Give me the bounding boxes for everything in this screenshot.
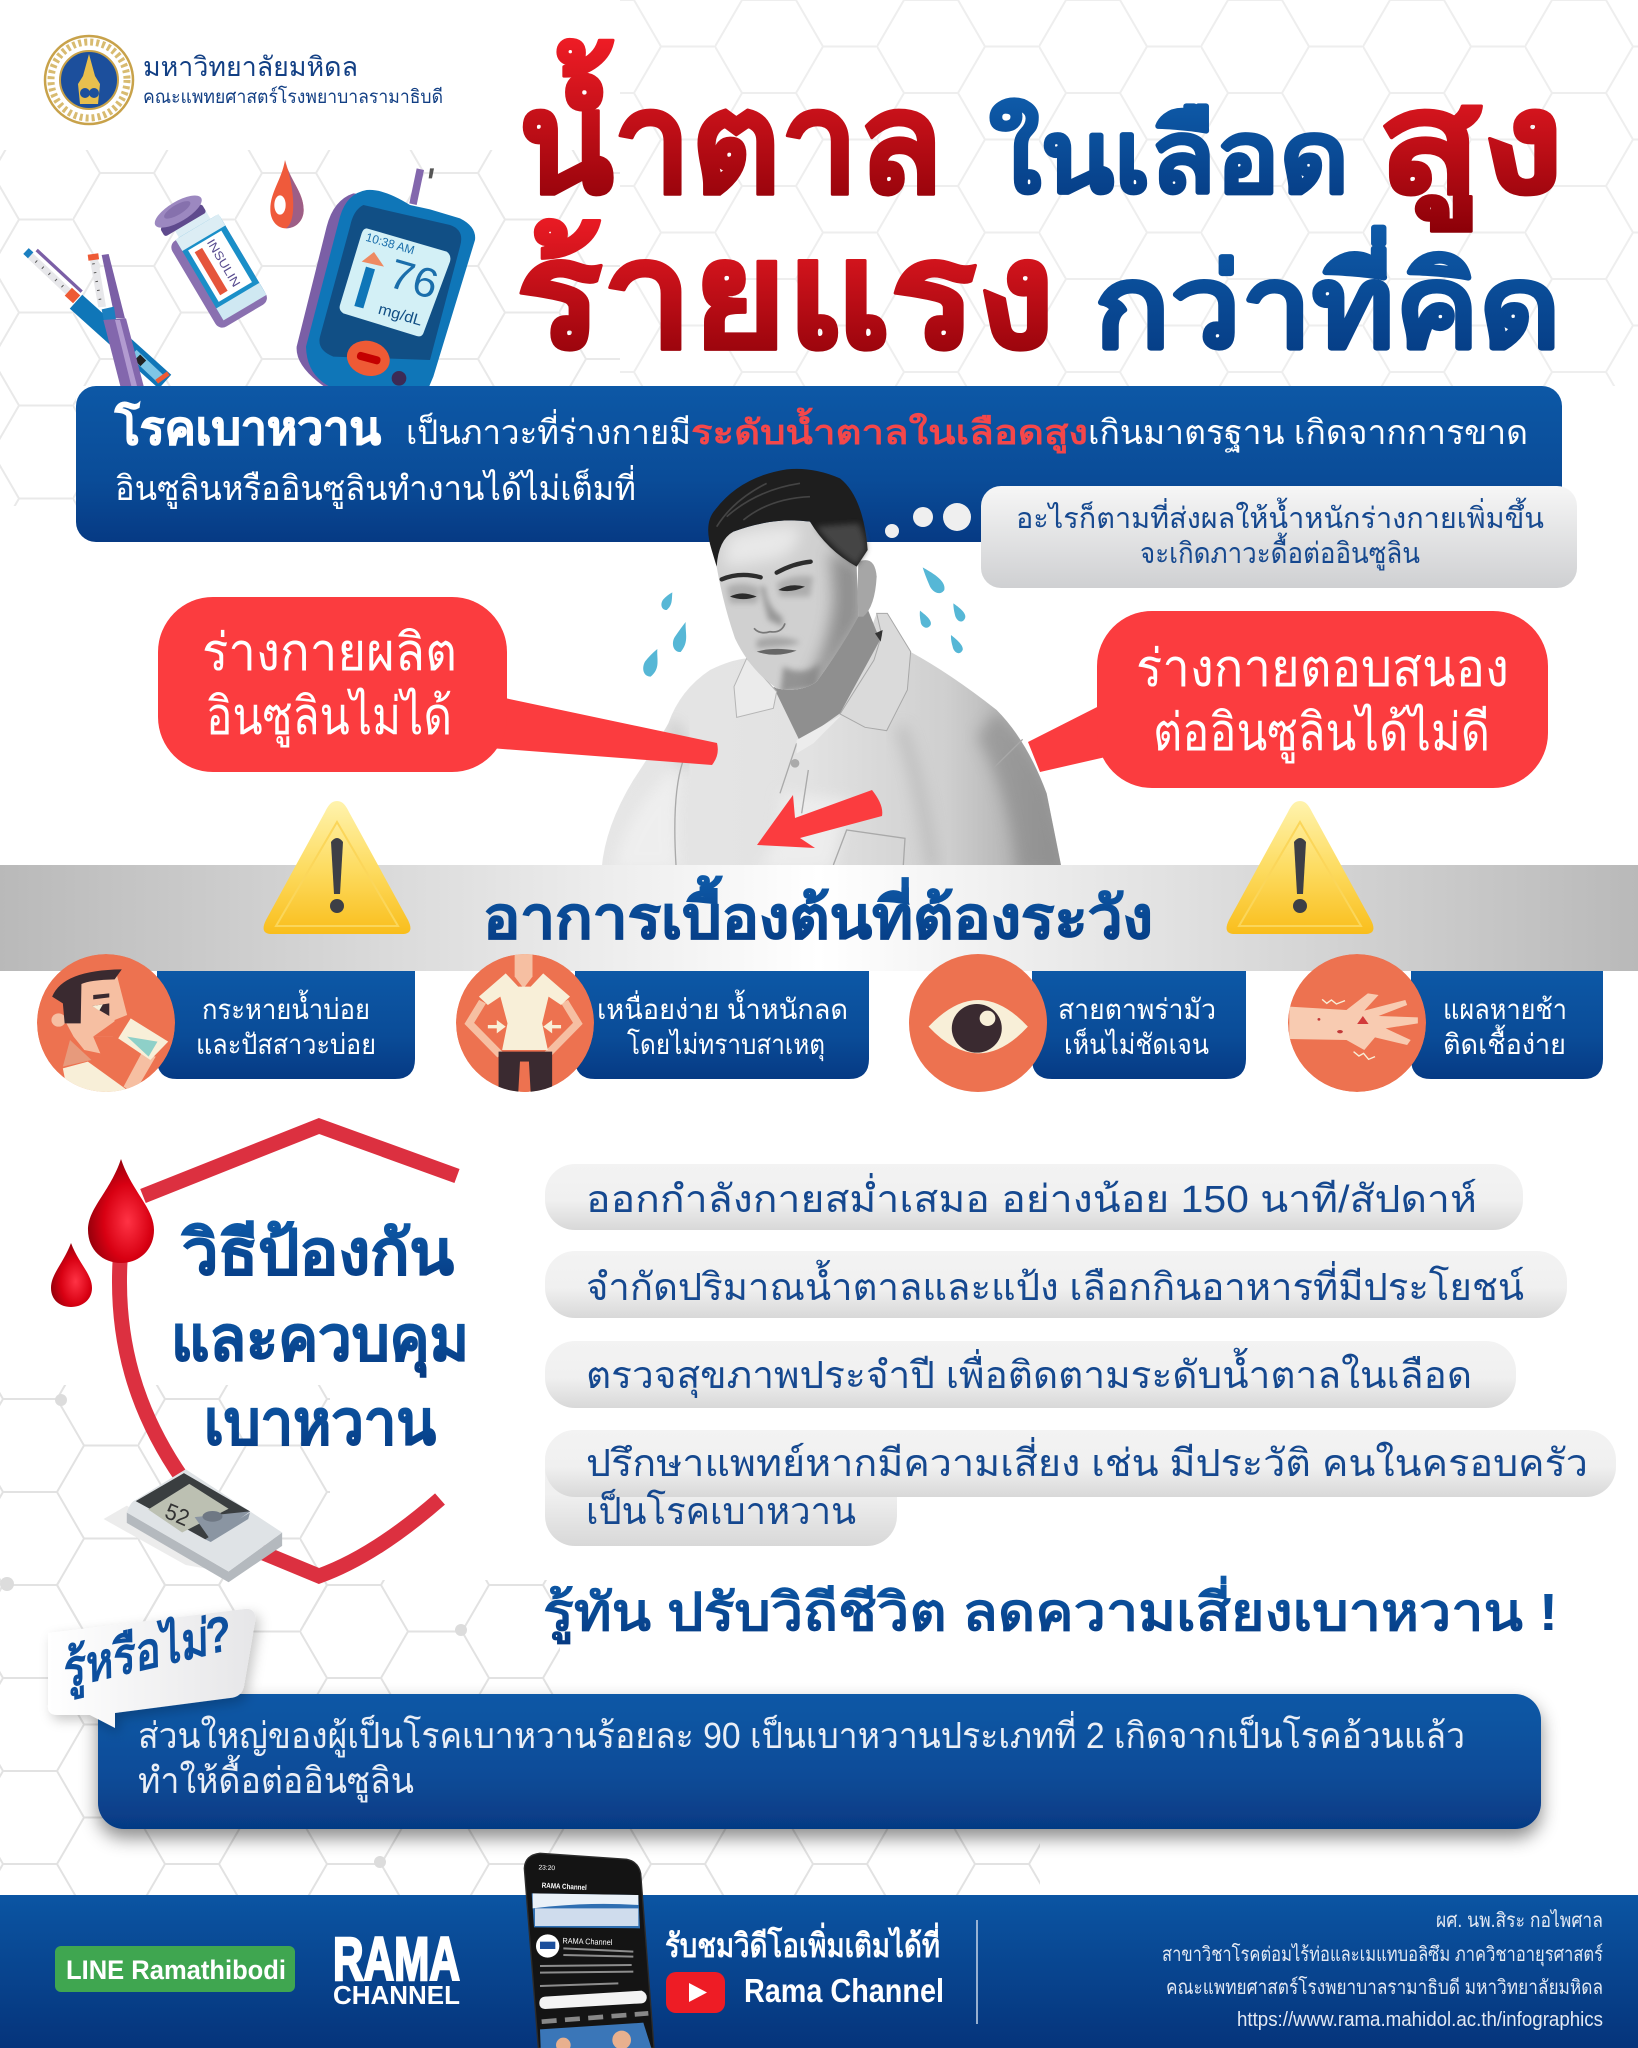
panel: did you know fact: ส่วนใหญ่ของผู้เป็นโรคเบาหวานร้อยละ 90 เป็นเบาหวานประเภทที่ 2 เกิดจากเป็นโรคอ้วนแล้ว xyxy=(138,1711,1465,1758)
icon: glucose meter xyxy=(297,168,475,388)
heading band: early symptoms xyxy=(0,865,1638,971)
symptom: fatigue and weight loss xyxy=(456,952,869,1093)
faculty name: คณะแพทยศาสตร์โรงพยาบาลรามาธิบดี xyxy=(143,85,443,108)
symptom label: สายตาพร่ามัว xyxy=(1058,994,1216,1025)
icon: blood glucose meter device xyxy=(104,1469,282,1582)
advice: consult doctor xyxy=(545,1430,1616,1546)
symptom: slow wound healing xyxy=(1288,954,1603,1092)
definition text line 1 xyxy=(406,407,1528,454)
author credits xyxy=(1162,1909,1603,2031)
undershirt opening xyxy=(797,715,842,753)
callout: insulin resistance note xyxy=(981,486,1577,588)
callout: body cannot produce insulin: อินซูลินไม่ได้ xyxy=(206,687,452,748)
panel: prevention heading xyxy=(51,1126,469,1582)
hair xyxy=(708,469,868,567)
icon: insulin vial xyxy=(150,186,270,331)
logo: RAMA Channel: RAMA xyxy=(333,1925,460,1993)
definition text line 2: อินซูลินหรืออินซูลินทำงานได้ไม่เต็มที่ xyxy=(115,465,636,509)
tag: did you know xyxy=(48,1604,255,1728)
illustration: diabetes supplies xyxy=(26,160,475,388)
title xyxy=(516,39,1564,379)
LINE button xyxy=(55,1946,295,1992)
symptom label xyxy=(1411,971,1603,1079)
panel: did you know fact: ทำให้ดื้อต่ออินซูลิน xyxy=(138,1754,414,1803)
photo: worried man xyxy=(602,469,1067,873)
symptom: blurred vision xyxy=(909,954,1246,1092)
prevention heading text: และควบคุม xyxy=(171,1305,469,1377)
symptom label: เห็นไม่ชัดเจน xyxy=(1064,1027,1209,1060)
advice: exercise: ออกกำลังกายสม่ำเสมอ อย่างน้อย 150 นาที/สัปดาห์ xyxy=(586,1173,1477,1221)
advice: consult doctor: เป็นโรคเบาหวาน xyxy=(586,1488,856,1533)
ear xyxy=(857,560,877,617)
icon: glucose meter: mg/dL xyxy=(376,301,425,330)
definition term: โรคเบาหวาน xyxy=(114,401,382,454)
callout: body cannot produce insulin xyxy=(158,597,718,772)
icon: eye xyxy=(909,954,1047,1092)
prevention heading text: เบาหวาน xyxy=(204,1389,436,1458)
logo: RAMA Channel xyxy=(333,1925,460,2010)
symptom label: เหนื่อยง่าย น้ำหนักลด xyxy=(597,989,848,1025)
panel: did you know fact xyxy=(98,1694,1541,1829)
icon: small blood drop xyxy=(51,1243,92,1307)
channel name: Rama Channel xyxy=(744,1972,944,2009)
title: ร้ายแรง xyxy=(516,211,1055,379)
shirt xyxy=(602,613,1067,873)
symptom label: กระหายน้ำบ่อย xyxy=(202,989,370,1025)
phone mockup xyxy=(524,1853,654,2048)
advice: diet: จำกัดปริมาณน้ำตาลและแป้ง เลือกกินอาหารที่มีประโยชน์ xyxy=(586,1259,1524,1309)
title: น้ำตาล xyxy=(519,39,943,223)
symptom: thirst and frequent urination xyxy=(37,954,415,1100)
arrow: pointing to the body xyxy=(757,790,882,848)
eyebrows xyxy=(722,562,811,579)
phone mockup: RAMA Channel xyxy=(562,1936,613,1947)
advice: exercise xyxy=(545,1164,1523,1230)
icon: wounded hand xyxy=(1288,954,1426,1092)
definition text line 1: เป็นภาวะที่ร่างกายมี xyxy=(406,409,691,452)
icon: YouTube xyxy=(666,1972,725,2013)
collar xyxy=(734,613,911,731)
symptom label: และปัสสาวะบ่อย xyxy=(196,1029,376,1060)
symptom label: โดยไม่ทราบสาเหตุ xyxy=(627,1028,825,1062)
icon: insulin pen one xyxy=(26,250,168,382)
eyes xyxy=(730,585,805,599)
symptom label: แผลหายช้า xyxy=(1443,994,1567,1025)
mouth xyxy=(757,649,797,655)
phone mockup: 23:20 xyxy=(538,1864,556,1872)
icon: glucose meter: 10:38 AM xyxy=(364,230,416,257)
author credits: https://www.rama.mahidol.ac.th/infographics xyxy=(1237,2009,1603,2031)
title: ในเลือด xyxy=(989,99,1349,214)
phone mockup: RAMA Channel xyxy=(542,1881,587,1892)
symptom label xyxy=(1032,971,1246,1079)
icon: blood glucose meter device: 52 xyxy=(162,1498,193,1531)
callout: insulin resistance note: จะเกิดภาวะดื้อต่ออินซูลิน xyxy=(1140,532,1420,571)
logo: RAMA Channel: CHANNEL xyxy=(333,1980,460,2010)
list: prevention advice xyxy=(545,1164,1616,1546)
icon: slim waist xyxy=(456,952,594,1093)
university name: มหาวิทยาลัยมหิดล xyxy=(143,52,358,82)
nose xyxy=(754,623,785,633)
symptom label: ติดเชื้อง่าย xyxy=(1443,1024,1566,1060)
callout: body responds poorly to insulin: ต่ออินซูลินได้ไม่ดี xyxy=(1153,703,1490,764)
definition text line 1: ระดับน้ำตาลในเลือดสูง xyxy=(691,407,1088,454)
icon: insulin vial: INSULIN xyxy=(204,237,243,290)
icon: university seal xyxy=(45,36,133,124)
icon: insulin pen two xyxy=(88,253,144,387)
callout: insulin resistance note: อะไรก็ตามที่ส่งผลให้น้ำหนักร่างกายเพิ่มขึ้น xyxy=(1016,497,1544,535)
author credits: ผศ. นพ.สิระ กอไพศาล xyxy=(1436,1909,1603,1932)
panel: diabetes definition xyxy=(76,386,1562,542)
neck xyxy=(773,607,880,742)
icon: man drinking xyxy=(37,954,175,1100)
symptom label xyxy=(575,971,869,1079)
advice: annual checkup xyxy=(545,1341,1516,1408)
callout: body responds poorly to insulin xyxy=(1028,611,1548,788)
thought bubble dots xyxy=(885,503,971,538)
callout: body responds poorly to insulin: ร่างกายตอบสนอง xyxy=(1136,640,1509,698)
icon: warning right xyxy=(1227,801,1373,934)
icon: warning left xyxy=(264,801,410,934)
prevention heading text xyxy=(171,1219,469,1458)
icon: blood drop xyxy=(270,160,304,228)
advice: annual checkup: ตรวจสุขภาพประจำปี เพื่อติดตามระดับน้ำตาลในเลือด xyxy=(586,1347,1472,1398)
red hexagon outline xyxy=(119,1126,457,1576)
face xyxy=(715,520,863,697)
advice: consult doctor: ปรึกษาแพทย์หากมีความเสี่ยง เช่น มีประวัติ คนในครอบครัว xyxy=(586,1437,1588,1485)
advice: diet xyxy=(545,1251,1567,1318)
slogan: รู้ทัน ปรับวิถีชีวิต ลดความเสี่ยงเบาหวาน ! xyxy=(543,1576,1558,1645)
title: สูง xyxy=(1378,64,1564,232)
prevention heading text: วิธีป้องกัน xyxy=(181,1219,454,1288)
LINE button: LINE Ramathibodi xyxy=(66,1955,286,1985)
icon: glucose meter: 76 xyxy=(384,249,444,308)
icon: sweat drops xyxy=(643,567,965,677)
symptom label xyxy=(157,971,415,1079)
title: กว่าที่คิด xyxy=(1094,226,1561,372)
logo: Mahidol University and Faculty name xyxy=(45,36,443,124)
definition text line 1: เกินมาตรฐาน เกิดจากการขาด xyxy=(1088,414,1528,453)
heading band: early symptoms: อาการเบื้องต้นที่ต้องระวัง xyxy=(483,876,1153,951)
footer xyxy=(0,1853,1638,2048)
icon: large blood drop xyxy=(88,1159,154,1263)
callout: body cannot produce insulin: ร่างกายผลิต xyxy=(202,624,457,682)
tag: did you know: รู้หรือไม่? xyxy=(54,1604,238,1702)
video invitation: รับชมวิดีโอเพิ่มเติมได้ที่ xyxy=(665,1922,940,1964)
